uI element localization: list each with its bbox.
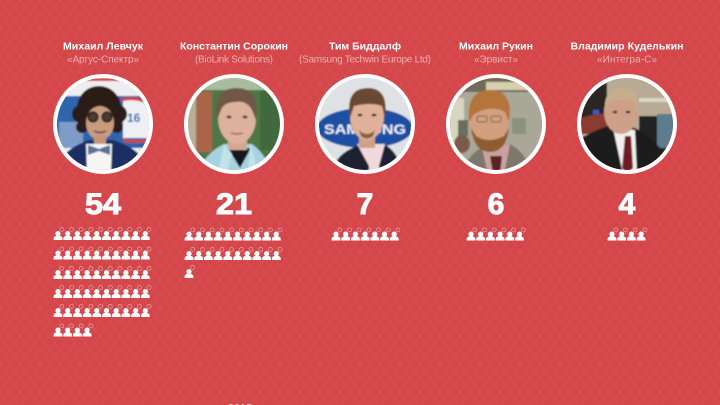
portrait <box>446 74 546 174</box>
count: 6 <box>488 188 504 221</box>
count: 21 <box>216 188 252 221</box>
company: «Интегра-С» <box>597 54 657 66</box>
count: 4 <box>619 188 636 221</box>
portrait <box>53 74 153 174</box>
portrait <box>315 74 415 174</box>
column: Михаил Рукин <box>446 40 546 240</box>
column: Владимир Куделькин <box>570 40 684 240</box>
company: «Эрвист» <box>474 54 518 66</box>
name: Михаил Рукин <box>459 40 533 52</box>
name: Константин Сорокин <box>180 40 288 52</box>
name: Михаил Левчук <box>63 40 144 52</box>
name: Владимир Куделькин <box>570 40 684 52</box>
portrait: 16 <box>127 111 141 125</box>
column: Константин Сорокин <box>180 40 288 278</box>
company: «Аргус-Спектр» <box>67 54 139 66</box>
count: 54 <box>85 188 121 221</box>
people icons: 21 <box>185 228 282 278</box>
people icons: 4 <box>608 228 647 240</box>
people icons: 6 <box>467 228 525 240</box>
company: (BioLink Solutions) <box>195 54 273 66</box>
portrait <box>577 74 677 174</box>
count: 7 <box>357 188 373 221</box>
people icons: 7 <box>332 228 400 240</box>
name: Тим Биддалф <box>329 40 401 52</box>
company: (Samsung Techwin Europe Ltd) <box>299 54 431 66</box>
column: Михаил Левчук <box>53 40 153 336</box>
portrait <box>184 74 284 174</box>
people icons: 54 <box>54 227 151 336</box>
column: Тим Биддалф <box>299 40 431 240</box>
portrait: SAMSUNG <box>324 121 406 137</box>
